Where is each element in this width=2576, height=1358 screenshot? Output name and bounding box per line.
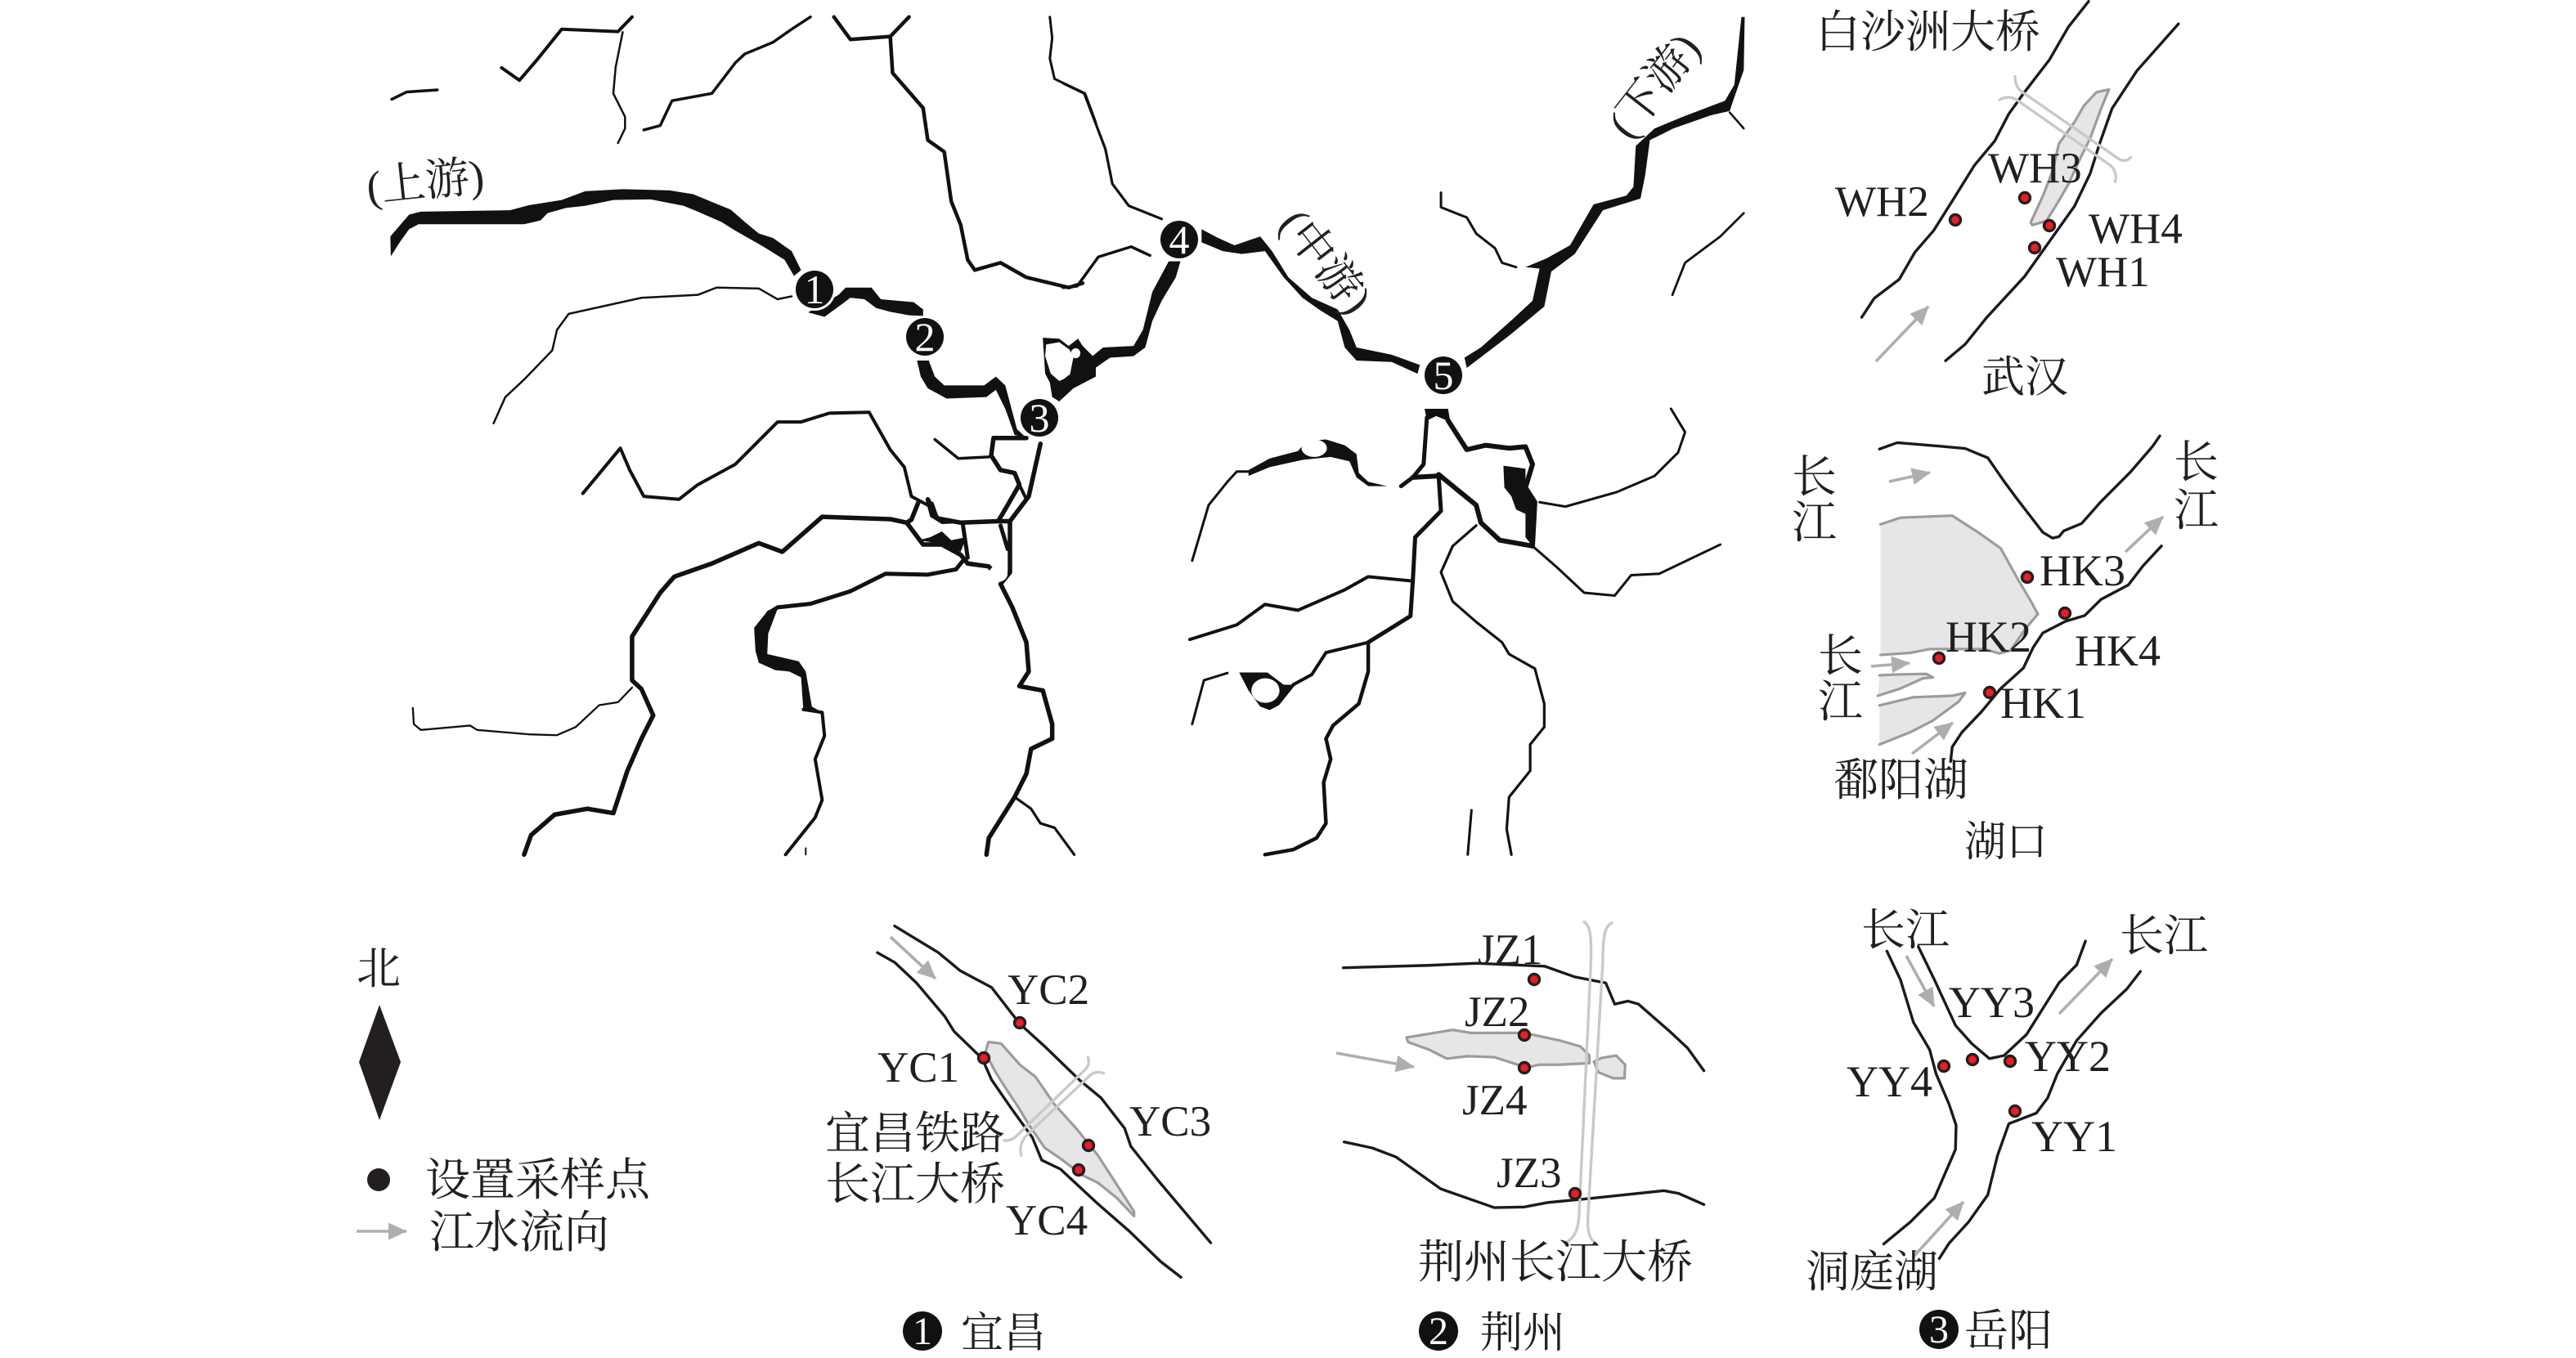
Jingzhou labels: JZ3 [1497,1150,1562,1197]
Hukou flow arrows [1871,473,2163,754]
Jingzhou caption [1419,1298,1565,1358]
rivers: south-west section [413,412,1075,854]
label: midstream: (中游) [1270,200,1381,323]
marker 1: 1 [805,267,824,312]
Yueyang labels: 长江 [2120,901,2208,964]
Jingzhou flow arrow [1336,1053,1414,1067]
Hukou labels: 长 [1792,441,1837,505]
Jingzhou labels: 荆州长江大桥 [1418,1226,1693,1292]
rivers: north-west section [390,17,1096,438]
inset: Wuhan [1815,0,2183,405]
Wuhan labels: WH4 [2089,205,2183,253]
Yichang labels [825,966,1211,1244]
rivers: south-east section [1190,409,1721,854]
Wuhan labels [1815,0,2183,405]
inset: Jingzhou [1336,921,1704,1358]
north label: 北 [357,934,401,997]
rivers: north-east section [1063,17,1744,396]
Hukou labels: 湖口 [1964,808,2048,868]
Jingzhou sampling points [1519,975,1580,1199]
Wuhan labels: WH2 [1835,178,1929,226]
Jingzhou labels: JZ2 [1465,988,1529,1036]
marker 2: 2 [914,314,936,360]
Yueyang labels: YY3 [1949,978,2035,1027]
Hukou labels: 江 [1792,486,1837,551]
Yichang sampling points [978,1017,1094,1176]
marker 3 [1018,395,1061,441]
Hukou labels: HK1 [2000,679,2086,728]
Yichang labels: YC1 [877,1044,959,1091]
Yueyang sampling points [1938,1055,2020,1117]
Hukou labels [1792,426,2219,868]
Wuhan labels: WH1 [2056,249,2150,296]
Wuhan labels: 武汉 [1981,343,2068,405]
marker 2 [904,314,946,360]
Jingzhou labels: JZ1 [1478,926,1542,974]
Yueyang labels: YY1 [2031,1112,2117,1161]
Hukou labels: 长 [1818,620,1863,684]
Jingzhou labels: JZ4 [1462,1077,1528,1124]
Hukou labels: HK2 [1945,612,2031,661]
Yichang flow arrow [891,937,936,979]
Yueyang channels [1883,941,2140,1258]
Yichang labels: YC3 [1129,1098,1211,1145]
inset: Yueyang [1806,895,2208,1358]
Yueyang caption [1919,1296,2053,1358]
Hukou labels: 鄱阳湖 [1833,744,1968,809]
Wuhan river channel and island [1862,2,2179,361]
inset: Yichang [825,926,1211,1358]
Yichang labels: YC2 [1008,966,1089,1014]
marker 3: 3 [1029,395,1050,441]
Yueyang caption: 3 [1929,1308,1949,1351]
Hukou labels: 长 [2174,426,2219,491]
Wuhan sampling points [1950,193,2054,253]
Yichang caption: 宜昌 [961,1298,1046,1358]
marker 4 [1158,217,1200,262]
Yichang labels: 长江大桥 [825,1148,1005,1212]
Jingzhou caption: 荆州 [1480,1298,1565,1358]
Yueyang labels [1806,895,2208,1300]
Hukou labels: 江 [1818,666,1863,730]
Hukou sampling points [1933,572,2071,698]
Hukou channels and lake shores [1878,436,2161,761]
Yichang caption [903,1298,1046,1358]
marker 1 [793,267,836,312]
Yichang labels: 宜昌铁路 [825,1097,1005,1162]
Yichang channels, island and bridge [877,926,1210,1277]
marker 5 [1422,352,1465,398]
label: downstream: (下游) [1599,25,1710,147]
Yueyang caption: 岳阳 [1964,1296,2053,1358]
legend: flow direction: 江水流向 [429,1196,609,1261]
Yueyang flow arrows [1906,956,2112,1257]
Yichang caption: 1 [913,1310,932,1353]
Hukou labels: 江 [2174,474,2219,539]
Yichang labels: YC4 [1006,1197,1088,1244]
label: upstream: (上游) [364,151,487,212]
Yueyang labels: 洞庭湖 [1806,1237,1938,1300]
legend [357,934,651,1261]
Jingzhou caption: 2 [1429,1310,1448,1353]
Jingzhou channels, island and bridge [1344,921,1704,1244]
Jingzhou labels [1418,926,1693,1292]
river map: Yangtze basin [364,17,1744,854]
marker 4: 4 [1169,217,1189,262]
marker 5: 5 [1433,352,1454,398]
Hukou labels: HK3 [2040,546,2125,595]
Yueyang labels: 长江 [1861,895,1950,958]
legend: sampling point: 设置采样点 [425,1144,651,1208]
Wuhan labels: WH3 [1988,145,2082,192]
Yueyang labels: YY4 [1847,1057,1932,1106]
Yueyang labels: YY2 [2025,1032,2111,1081]
Hukou labels: HK4 [2075,626,2161,675]
inset: Hukou [1792,426,2219,868]
Wuhan flow arrow [1876,307,1928,361]
north arrow diamond [359,1005,401,1120]
